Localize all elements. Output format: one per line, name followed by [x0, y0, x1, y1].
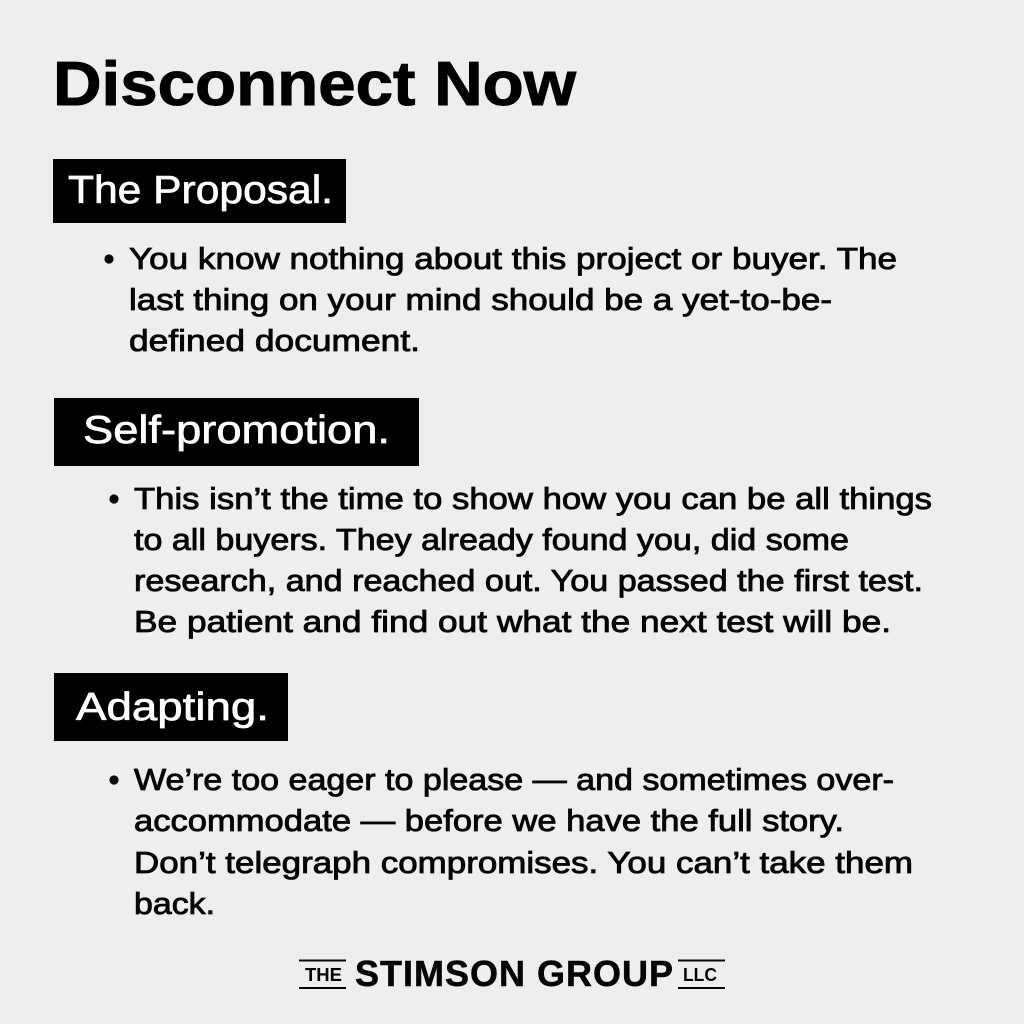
heading: adapting: Adapting. [76, 686, 269, 729]
bullet text: the proposal [104, 241, 897, 358]
panel: the proposal [53, 159, 897, 358]
bullet text: adapting: Don’t telegraph compromises. You can’t take them [134, 845, 913, 880]
bullet text: self-promotion: This isn’t the time to show how you can be all things [134, 481, 932, 516]
heading: the proposal: The Proposal. [68, 169, 333, 212]
bullet text: self-promotion: Be patient and find out what the next test will be. [134, 604, 891, 639]
bullet text: self-promotion: to all buyers. They already found you, did some [134, 522, 849, 557]
bullet text: the proposal: You know nothing about this project or buyer. The [129, 241, 897, 276]
bullet text: adapting: We’re too eager to please — and sometimes over- [134, 762, 894, 797]
bullet text: self-promotion [109, 481, 932, 639]
bullet text: adapting: back. [134, 886, 215, 921]
logo: the stimson group llc: STIMSON GROUP [355, 953, 673, 994]
heading: the proposal [53, 159, 346, 223]
bullet text: self-promotion: research, and reached out. You passed the first test. [134, 563, 923, 598]
heading: self-promotion [54, 398, 419, 466]
title: Disconnect Now [53, 50, 577, 119]
bullet text: adapting: accommodate — before we have the full story. [134, 803, 844, 838]
panel: self-promotion [54, 398, 932, 639]
logo: the stimson group llc: LLC [683, 965, 717, 985]
panel: adapting [54, 673, 913, 921]
bullet text: the proposal: last thing on your mind should be a yet-to-be- [129, 282, 832, 317]
heading: self-promotion: Self-promotion. [83, 409, 390, 452]
logo: the stimson group llc: THE [305, 965, 342, 985]
heading: adapting [54, 673, 288, 741]
bullet text: the proposal: defined document. [129, 323, 420, 358]
bullet text: adapting [109, 762, 913, 921]
